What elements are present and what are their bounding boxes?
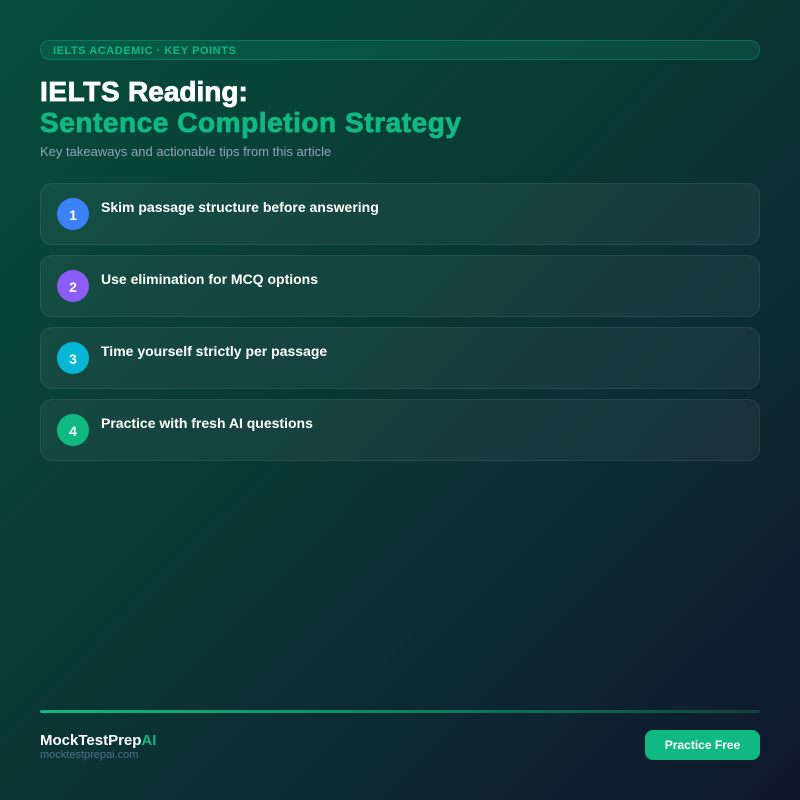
text: point 1: Skim passage structure before answering xyxy=(101,199,379,215)
icon: number 4: 4 xyxy=(69,423,77,439)
panel: point 2 xyxy=(40,255,760,317)
icon: number 3 xyxy=(57,342,89,374)
subtitle: Key takeaways and actionable tips from this article xyxy=(40,144,331,159)
icon: number 3: 3 xyxy=(69,351,77,367)
badge: IELTS Academic key points: IELTS ACADEMIC · KEY POINTS xyxy=(53,45,236,57)
website url: mocktestprepai.com xyxy=(40,749,138,761)
icon: number 1 xyxy=(57,198,89,230)
icon: number 2: 2 xyxy=(69,279,77,295)
panel: point 1 xyxy=(40,183,760,245)
panel: point 3 xyxy=(40,327,760,389)
icon: number 1: 1 xyxy=(69,207,77,223)
panel: point 4 xyxy=(40,399,760,461)
title: Sentence Completion Strategy xyxy=(40,107,461,138)
icon: number 4 xyxy=(57,414,89,446)
text: point 2: Use elimination for MCQ options xyxy=(101,271,318,287)
footer accent line xyxy=(40,710,760,713)
brand name: MockTestPrepAI xyxy=(40,732,156,749)
call-to-action button xyxy=(645,730,760,760)
text: point 4: Practice with fresh AI questions xyxy=(101,415,313,431)
icon: number 2 xyxy=(57,270,89,302)
title: IELTS Reading: xyxy=(40,76,248,107)
title xyxy=(40,76,462,138)
call-to-action button: Practice Free xyxy=(665,738,740,752)
text: point 3: Time yourself strictly per passage xyxy=(101,343,327,359)
badge: IELTS Academic key points xyxy=(40,40,760,60)
